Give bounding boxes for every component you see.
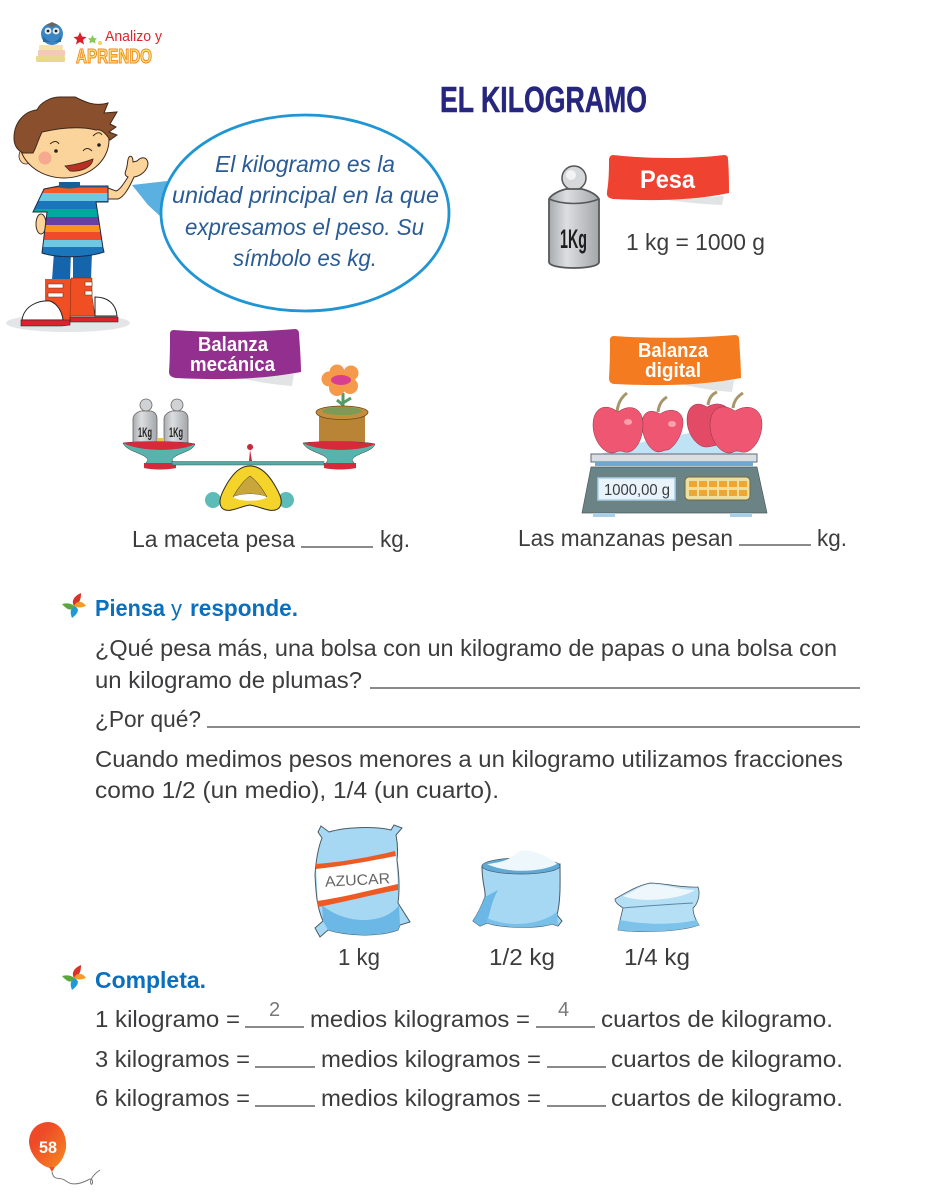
left weights bbox=[133, 399, 188, 445]
flower pot bbox=[316, 406, 368, 445]
label: Balanza mecánica: Balanza bbox=[198, 334, 269, 356]
bag: 1 kg: AZUCAR bbox=[325, 870, 391, 891]
sentence: apples weight bbox=[518, 525, 847, 551]
hair bbox=[14, 97, 117, 153]
bubble text: El kilogramo es la bbox=[215, 151, 395, 177]
beam bbox=[172, 462, 324, 465]
icon: stars bbox=[74, 32, 102, 45]
icon: owl on books bbox=[36, 22, 65, 62]
sentence: apples weight: Las manzanas pesan bbox=[518, 525, 733, 551]
pivot bbox=[247, 444, 253, 461]
left weights: 1Kg bbox=[169, 424, 183, 440]
label: Pesa bbox=[607, 155, 729, 205]
heading: Piensa y responde: responde. bbox=[190, 595, 298, 621]
shirt with stripes bbox=[32, 186, 108, 258]
exercise row 1 bbox=[95, 999, 833, 1032]
arm and hand bbox=[108, 156, 148, 199]
speech bubble bbox=[132, 115, 449, 311]
head bbox=[19, 102, 109, 178]
icon: 1 kg weight: 1Kg bbox=[560, 224, 587, 254]
exercise row 2: cuartos de kilogramo. bbox=[611, 1046, 843, 1072]
heading: Piensa y responde: Piensa bbox=[95, 595, 165, 621]
body bbox=[582, 467, 767, 513]
bag labels: 1/2 kg bbox=[489, 944, 555, 970]
right pan bbox=[303, 442, 375, 470]
bubble text: símbolo es kg. bbox=[233, 245, 377, 271]
blue tray contents bbox=[600, 433, 745, 454]
page number balloon bbox=[29, 1122, 100, 1184]
exercise row 3: 6 kilogramos = bbox=[95, 1085, 250, 1111]
equivalence text: 1 kg = 1000 g bbox=[626, 229, 765, 255]
icon: 1 kg weight bbox=[549, 166, 599, 268]
heading: Piensa y responde bbox=[62, 593, 298, 621]
apple 3 bbox=[687, 404, 730, 447]
bag labels: 1/4 kg bbox=[624, 944, 690, 970]
exercise row 1: 4 bbox=[558, 999, 569, 1021]
bag: 1 kg bbox=[315, 825, 410, 937]
neck collar bbox=[59, 182, 80, 188]
apple stems bbox=[617, 392, 743, 412]
apple highlights bbox=[624, 419, 676, 427]
sentence: flowerpot weight: La maceta pesa bbox=[132, 526, 295, 552]
exercise row 3: medios kilogramos = bbox=[321, 1085, 541, 1111]
label: Balanza digital: digital bbox=[645, 360, 701, 382]
exercise row 2: medios kilogramos = bbox=[321, 1046, 541, 1072]
plate bbox=[591, 454, 757, 462]
bubble outline bbox=[161, 115, 449, 311]
exercise row 1: 2 bbox=[269, 999, 280, 1021]
left pan bbox=[123, 442, 195, 470]
digital scale with apples bbox=[582, 392, 767, 517]
bag labels: 1 kg bbox=[338, 944, 380, 970]
exercise row 1: medios kilogramos = bbox=[310, 1006, 530, 1032]
explanation text: Cuando medimos pesos menores a un kilogramo utilizamos fracciones bbox=[95, 746, 843, 772]
bag: 1/4 kg bbox=[615, 883, 699, 932]
exercise row 3: cuartos de kilogramo. bbox=[611, 1085, 843, 1111]
logo text: Aprendo: APRENDO bbox=[76, 46, 152, 68]
back hand bbox=[36, 214, 46, 234]
digital scale with apples: 1000,00 g bbox=[604, 482, 670, 499]
label: Balanza mecánica bbox=[169, 329, 301, 386]
bag labels bbox=[338, 944, 690, 970]
exercise row 1: cuartos de kilogramo. bbox=[601, 1006, 833, 1032]
heading: Piensa y responde: y bbox=[171, 596, 182, 621]
apple 2 bbox=[642, 410, 683, 452]
title: EL KILOGRAMO bbox=[440, 79, 647, 120]
boots bbox=[21, 278, 118, 326]
mechanical scale bbox=[123, 364, 375, 510]
question text: ¿Qué pesa más, una bolsa con un kilogramo de papas o una bolsa con bbox=[95, 635, 837, 661]
left weights: 1Kg bbox=[138, 424, 152, 440]
apple 1 bbox=[593, 407, 643, 453]
icon: pinwheel bbox=[62, 593, 86, 618]
icon: pinwheel bbox=[62, 965, 86, 990]
yellow base bbox=[220, 466, 281, 510]
buttons bbox=[685, 477, 750, 500]
question text: ¿Por qué? bbox=[95, 706, 201, 732]
exercise row 2: 3 kilogramos = bbox=[95, 1046, 250, 1072]
display bbox=[598, 478, 675, 500]
ear bbox=[19, 148, 33, 164]
logo: Analizo y Aprendo bbox=[36, 22, 162, 68]
explanation text bbox=[95, 746, 843, 803]
bubble text: unidad principal en la que bbox=[172, 182, 439, 208]
legs bbox=[52, 252, 71, 280]
flower bbox=[322, 364, 358, 412]
exercise row 3 bbox=[95, 1085, 843, 1111]
face details bbox=[38, 152, 52, 164]
bubble text: expresamos el peso. Su bbox=[185, 214, 424, 240]
question text: un kilogramo de plumas? bbox=[95, 667, 362, 693]
label: Balanza digital: Balanza bbox=[638, 340, 709, 362]
apple 4 bbox=[710, 407, 762, 453]
exercise row 2 bbox=[95, 1046, 843, 1072]
explanation text: como 1/2 (un medio), 1/4 (un cuarto). bbox=[95, 777, 499, 803]
question text bbox=[95, 635, 860, 732]
base feet bbox=[205, 492, 221, 508]
character: boy bbox=[6, 97, 148, 332]
bubble tail bbox=[132, 181, 167, 217]
label: Pesa: Pesa bbox=[640, 166, 696, 194]
label: Balanza digital bbox=[609, 335, 741, 392]
label: Balanza mecánica: mecánica bbox=[190, 354, 276, 376]
logo text: Analizo y: Analizo y bbox=[105, 28, 162, 45]
bubble text bbox=[172, 151, 439, 271]
sentence: apples weight: kg. bbox=[817, 525, 847, 551]
heading: Completa: Completa. bbox=[95, 967, 206, 993]
bag: 1/2 kg bbox=[473, 850, 562, 927]
exercise row 1: 1 kilogramo = bbox=[95, 1006, 240, 1032]
sentence: flowerpot weight bbox=[132, 526, 410, 552]
feet bbox=[593, 513, 615, 517]
sentence: flowerpot weight: kg. bbox=[380, 526, 410, 552]
page number balloon: 58 bbox=[39, 1138, 57, 1157]
